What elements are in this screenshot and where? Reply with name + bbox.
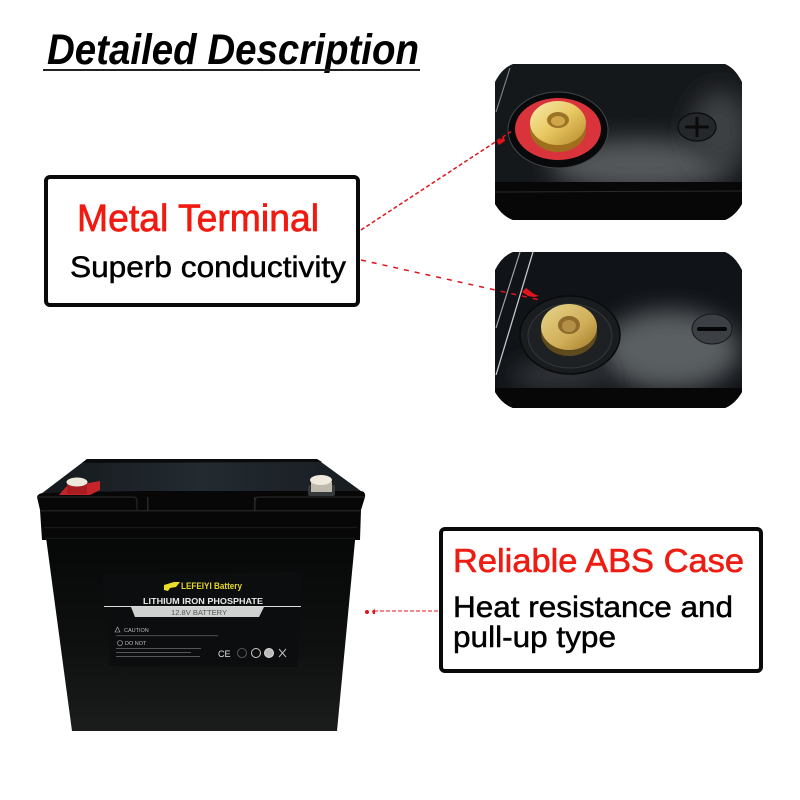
battery top face (37, 459, 365, 497)
battery photo (37, 459, 365, 731)
label do not: DO NOT (125, 641, 147, 647)
arrow: to negative terminal (361, 260, 540, 300)
callout heading: Metal Terminal (77, 198, 319, 240)
callout: Reliable ABS Case (441, 529, 761, 671)
label certification marks (218, 648, 286, 659)
battery label (102, 572, 303, 667)
icon: plus symbol (678, 113, 716, 141)
label caution: CAUTION (124, 628, 149, 634)
icon: minus symbol (692, 314, 732, 344)
callout: Metal Terminal (46, 177, 358, 305)
icon: negative terminal (520, 296, 620, 374)
icon: battery negative post (308, 475, 335, 496)
icon: battery positive post (59, 478, 100, 495)
label brand: LEFEIYI Battery (181, 581, 243, 592)
title: Detailed Description: Detailed Description (47, 26, 419, 74)
callout description (453, 591, 733, 654)
callout description: Superb conductivity (70, 251, 346, 284)
callout description: Heat resistance and (453, 591, 733, 624)
battery body (45, 530, 356, 731)
icon: positive terminal (508, 92, 608, 168)
photo: negative terminal close-up (495, 252, 742, 408)
arrow: to positive terminal (361, 131, 512, 230)
label brand logo (164, 582, 180, 591)
battery label: 12.8V BATTERY (171, 610, 227, 617)
arrow: to battery case (365, 609, 440, 614)
callout description: pull-up type (453, 621, 616, 654)
label heading: LITHIUM IRON PHOSPHATE (143, 596, 263, 606)
callout heading: Reliable ABS Case (453, 542, 744, 579)
label certification marks: CE (218, 649, 231, 659)
label voltage strip (131, 607, 264, 617)
battery lid band (37, 491, 365, 540)
photo: positive terminal close-up (495, 64, 750, 220)
